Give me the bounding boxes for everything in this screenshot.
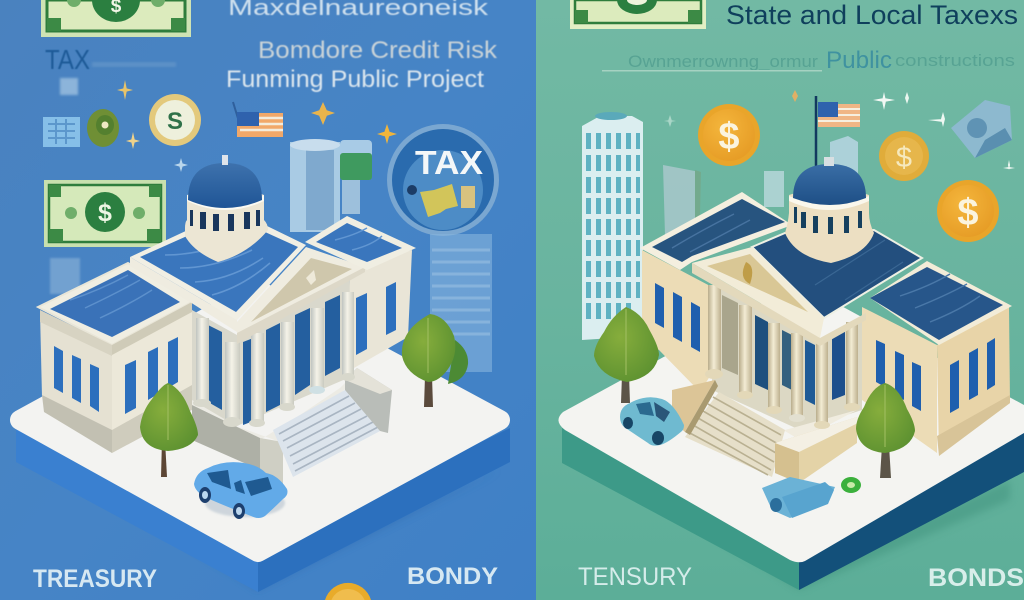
platform right [558, 283, 1024, 590]
central roof [752, 230, 922, 318]
panel: municipal bonds (right) [536, 0, 1024, 600]
tree left front [140, 383, 198, 477]
right wing wall [347, 250, 412, 372]
right wing roof [305, 216, 416, 270]
text block: public line: Ownmerrownng_ormur [628, 52, 818, 71]
text block: public line: Public [826, 47, 892, 74]
tree right [402, 314, 468, 407]
icon: small building tile [43, 117, 80, 147]
icon: tax badge [387, 124, 499, 236]
right wing roof [870, 261, 1012, 345]
text block: credit risk and public project: Bomdore Credit Risk [258, 37, 498, 64]
dome [785, 157, 874, 263]
icon: gold coin three: $ [957, 192, 979, 234]
icon: flag right [816, 96, 860, 171]
building left [38, 155, 416, 487]
icon: flag left [233, 102, 283, 137]
portico back wall [192, 272, 350, 428]
icon: coin at bottom edge [325, 583, 371, 600]
icon: tall office building [582, 112, 643, 340]
platform left [16, 290, 510, 592]
icon: dollar bill top [570, 0, 706, 29]
icon: faint tall building right [430, 234, 492, 372]
text block: public line [602, 47, 1015, 74]
icon: gold coin one: $ [718, 116, 740, 158]
columns [705, 285, 860, 429]
illustration: faint texture patch [50, 258, 80, 294]
portico floor, blocks and stairs [672, 380, 860, 483]
right wing walls [862, 307, 1010, 456]
icon: second dollar bill [44, 180, 166, 247]
icon: second dollar bill: $ [98, 199, 112, 227]
left wing wall [642, 250, 712, 392]
label: treasury: TREASURY [33, 565, 157, 593]
dome [185, 155, 268, 262]
icon: dollar coin left [149, 94, 201, 146]
portico back wall [712, 285, 862, 430]
icon: gold coin two: $ [896, 142, 912, 174]
label: tensury: TENSURY [578, 563, 692, 591]
icon: background tower left [290, 139, 372, 232]
tree right panel left [594, 307, 659, 403]
icon: gold coin two [879, 131, 929, 181]
icon: gold coin three [937, 180, 999, 242]
columns [193, 292, 355, 427]
icon: gold coin one [698, 104, 760, 166]
heading: state and local taxes: State and Local Taxexs [726, 0, 1018, 30]
building right [640, 157, 1012, 483]
icon: dollar bill top left [41, 0, 191, 37]
central roof [130, 222, 306, 332]
car left [194, 462, 288, 519]
left wing roof [640, 192, 792, 270]
icon: dollar coin left: S [167, 108, 183, 135]
label: tax [45, 44, 176, 95]
icon: green badge [87, 109, 119, 147]
left wing roof [38, 263, 192, 345]
tree right panel front [856, 383, 915, 478]
label: bonds: BONDS [928, 564, 1024, 592]
icon: blue parcel and green note [762, 477, 861, 518]
label: tax: TAX [45, 44, 90, 75]
left wing walls [40, 305, 192, 453]
icon: blue abstract shape top right [951, 100, 1012, 158]
icon: background buildings [663, 136, 858, 235]
car right [620, 397, 684, 446]
entablature strip [40, 302, 192, 356]
panel: treasury bonds (left) [0, 0, 536, 600]
text block: public line: constructions [895, 51, 1015, 70]
text block: credit risk and public project [226, 37, 498, 93]
icon: sparkle stars left [117, 80, 397, 172]
pediment [237, 247, 365, 344]
icon: sparkles right [664, 90, 1015, 170]
label: bondy: BONDY [407, 563, 498, 590]
pediment [692, 247, 866, 346]
portico base and steps [192, 368, 392, 487]
text block: credit risk and public project: Funming Public Project [226, 66, 484, 93]
icon: tax badge: TAX [415, 144, 483, 181]
